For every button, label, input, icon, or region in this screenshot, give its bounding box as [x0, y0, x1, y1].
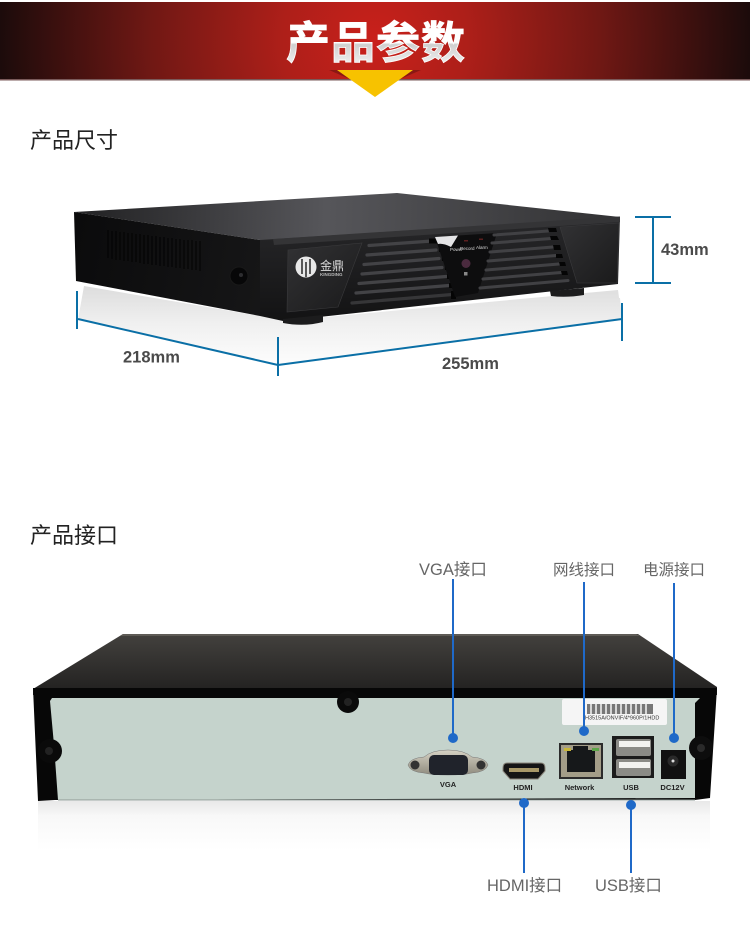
icon: yellow down arrow — [329, 70, 421, 97]
dimension: width 255mm — [278, 303, 622, 376]
panel: front product photo: Power — [450, 247, 463, 252]
device side — [74, 212, 260, 316]
callout: power: 电源接口 — [643, 561, 705, 579]
panel: front product photo: Alarm — [476, 245, 488, 250]
callout: network — [553, 561, 615, 736]
VGA port — [408, 750, 488, 789]
screws — [337, 691, 359, 713]
network port — [559, 743, 603, 792]
logo: KINGDING — [320, 272, 343, 277]
DC power port — [660, 750, 686, 792]
barcode sticker: H3515A/ONVIF/4*960P/1HDD — [585, 716, 659, 722]
callout: HDMI: HDMI接口 — [487, 876, 562, 895]
panel: front product photo: Record — [460, 246, 475, 251]
network port: Network — [565, 783, 595, 792]
callout: network: 网线接口 — [553, 561, 615, 579]
device front — [260, 217, 620, 321]
USB port — [612, 736, 654, 792]
barcode sticker — [562, 699, 667, 725]
header banner — [0, 2, 750, 80]
side vent — [108, 230, 200, 271]
callout: VGA — [419, 560, 487, 743]
device top — [74, 193, 620, 240]
callout: VGA: VGA接口 — [419, 560, 487, 579]
VGA port: VGA — [440, 780, 457, 789]
rear frame — [33, 688, 717, 801]
dimension: height 43mm: 43mm — [661, 241, 709, 259]
logo — [296, 256, 344, 278]
dimension: depth 218mm — [77, 291, 278, 366]
callout: USB: USB接口 — [595, 876, 662, 895]
panel: front product photo — [74, 193, 622, 366]
side knob — [230, 267, 248, 285]
center panel — [435, 233, 497, 297]
heading: product ports: 产品接口 — [30, 523, 118, 548]
heading: product size: 产品尺寸 — [30, 128, 118, 153]
left grill — [352, 241, 452, 303]
callout: USB — [595, 800, 662, 895]
feet — [283, 315, 323, 325]
dimension: height 43mm — [635, 217, 709, 283]
dimension: width 255mm: 255mm — [442, 355, 499, 373]
rear plate — [50, 698, 700, 800]
rear top — [33, 634, 717, 695]
HDMI port: HDMI — [513, 783, 533, 792]
right grill — [480, 231, 568, 288]
callout: power — [643, 561, 705, 743]
dimension: depth 218mm: 218mm — [123, 348, 180, 366]
callout: HDMI — [487, 798, 562, 895]
logo: 金鼎 — [320, 258, 344, 273]
panel: rear product photo — [33, 634, 717, 851]
DC power port: DC12V — [660, 783, 685, 792]
banner title: 产品参数 — [286, 19, 466, 68]
HDMI port — [503, 763, 545, 792]
logo plate — [287, 243, 362, 312]
USB port: USB — [623, 783, 639, 792]
right plate — [560, 223, 619, 283]
